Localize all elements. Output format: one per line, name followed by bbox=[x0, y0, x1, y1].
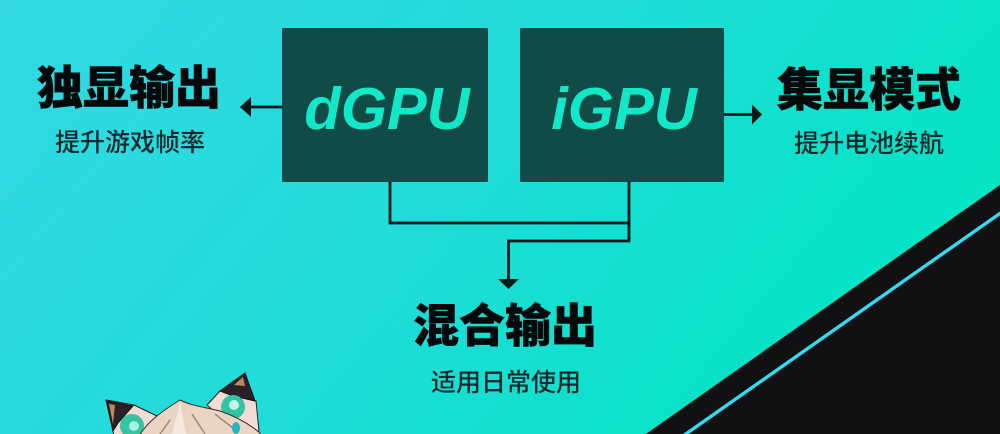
box: iGPU: iGPU bbox=[551, 75, 697, 142]
heading: hybrid output: 混合输出 bbox=[413, 300, 597, 352]
icon: left ear gem bbox=[120, 414, 144, 434]
box: dGPU: dGPU bbox=[304, 75, 470, 142]
box: dGPU bbox=[282, 28, 488, 182]
icon: right ear bbox=[207, 373, 259, 434]
heading: integrated mode: 集显模式 bbox=[777, 64, 961, 116]
text: discrete output benefit: 提升游戏帧率 bbox=[55, 129, 205, 157]
icon: right ear gem bbox=[221, 395, 245, 419]
icon: left ear bbox=[106, 400, 157, 434]
hair bbox=[138, 400, 260, 434]
text: hybrid output use: 适用日常使用 bbox=[431, 369, 581, 397]
text: integrated mode benefit: 提升电池续航 bbox=[794, 130, 944, 158]
box: iGPU bbox=[520, 28, 724, 182]
heading: discrete output: 独显输出 bbox=[37, 62, 221, 114]
